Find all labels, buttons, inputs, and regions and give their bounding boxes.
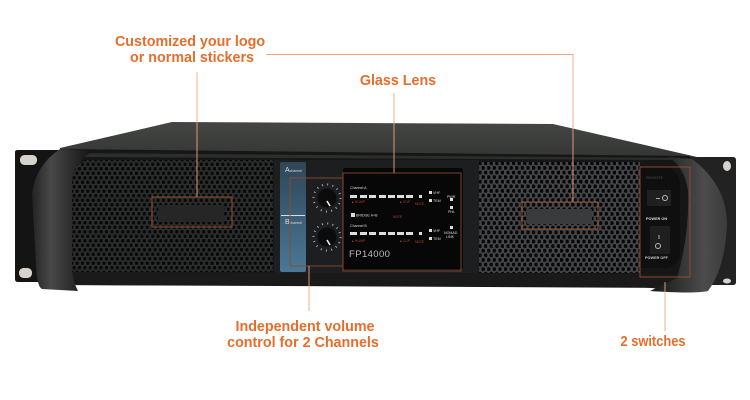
glass display: MUTE (393, 215, 402, 219)
left logo sticker plate (158, 205, 224, 222)
power switch module: POWER ON (646, 217, 667, 221)
callout: custom logo: Customized your logo (115, 34, 265, 50)
power switch module (640, 167, 680, 268)
glass display: VHF (433, 191, 441, 195)
glass display: MUTE (415, 202, 424, 206)
right speaker grille (478, 162, 640, 273)
left speaker grille (72, 160, 273, 272)
right handle (650, 157, 727, 292)
glass display (343, 168, 463, 269)
power switch module: REMOTE (646, 175, 663, 180)
glass display: MUTE (415, 240, 424, 244)
channel strip (280, 162, 306, 272)
front top edge band (72, 153, 680, 160)
volume knob B (314, 224, 340, 250)
glass display: Channel B (350, 224, 367, 228)
glass display: TEM (433, 199, 441, 203)
right logo sticker plate (527, 209, 592, 224)
callout: glass lens: Glass Lens (360, 73, 436, 89)
volume knob A (314, 184, 340, 212)
power switch module: POWER OFF (645, 256, 669, 260)
glass display: ▲ CLIP (399, 239, 410, 243)
chassis top cover (60, 122, 697, 170)
lower trim (70, 272, 684, 291)
left rack ear (15, 150, 60, 282)
glass display: VHF (433, 229, 441, 233)
centre control panel (274, 160, 479, 273)
glass display: LINK (446, 235, 455, 239)
glass display: TEM (433, 237, 441, 241)
glass display: PHL (448, 210, 455, 214)
channel strip: Achannel (285, 167, 302, 174)
glass display: PWR (447, 195, 456, 199)
glass display: NOMAD (444, 231, 458, 235)
front face (60, 149, 692, 288)
channel strip: Bchannel (285, 219, 302, 226)
glass display: BRIDGE A+B (356, 214, 378, 218)
glass display: Channel A (350, 186, 367, 190)
callout: custom logo: or normal stickers (130, 50, 254, 66)
callout leader lines and boxes (152, 54, 690, 331)
callout: switches: 2 switches (620, 334, 686, 350)
glass display: ▲ HI-IMP (351, 200, 365, 204)
callout: volume control: Independent volume (235, 319, 375, 335)
right rack ear (690, 157, 736, 285)
top rocker switch (647, 190, 671, 206)
callout: volume control: control for 2 Channels (227, 335, 379, 351)
bottom rocker switch (650, 226, 670, 254)
glass display: ▲ HI-IMP (351, 239, 365, 243)
left handle (32, 149, 95, 291)
glass display: FP14000 (349, 249, 390, 260)
amplifier chassis (15, 122, 736, 292)
glass display: ▲ CLIP (399, 200, 410, 204)
